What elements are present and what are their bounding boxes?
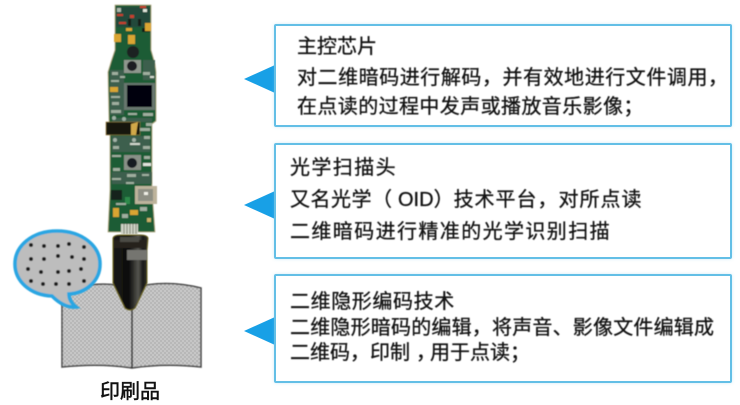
main control chip: [124, 83, 155, 110]
panel: 2D invisible coding: [274, 274, 732, 383]
label: printed matter: 印刷品: [100, 381, 160, 403]
ribbon connector: [121, 224, 138, 234]
chip description line 1: 对二维暗码进行解码，并有效地进行文件调用，: [297, 67, 729, 89]
chip heading: 主控芯片: [297, 36, 377, 58]
top header section: [116, 6, 150, 32]
yellow capacitors: [110, 23, 151, 217]
arrow: code callout pointer: [244, 318, 274, 344]
dense traces: [110, 60, 155, 184]
usb socket and small chip: [111, 186, 157, 204]
chip description line 2: 在点读的过程中发声或播放音乐影像；: [297, 96, 644, 118]
speech bubble with code dots: [15, 231, 100, 307]
buttons: [124, 46, 141, 170]
coding heading: 二维隐形编码技术: [290, 291, 455, 313]
printed book: [62, 284, 201, 368]
illustration: pen and printed book: [12, 4, 202, 370]
coding description line 1: 二维隐形暗码的编辑，将声音、影像文件编辑成: [290, 317, 714, 339]
coding description line 2: 二维码，印制 ，用于点读；: [290, 342, 530, 364]
circuit board: [106, 5, 157, 234]
board components: [111, 72, 154, 222]
panel: main control chip: [274, 24, 732, 127]
scanner description line 1: 又名光学（ OID）技术平台，对所点读: [290, 189, 643, 211]
arrow: chip callout pointer: [244, 66, 274, 92]
panel: optical scanning head: [274, 143, 732, 259]
arrow: scanner callout pointer: [244, 192, 274, 218]
optical scanning pen head: [113, 235, 148, 310]
audio jack: [106, 116, 140, 142]
scanner description line 2: 二维暗码进行精准的光学识别扫描: [290, 221, 611, 243]
scanner heading: 光学扫描头: [290, 157, 397, 179]
